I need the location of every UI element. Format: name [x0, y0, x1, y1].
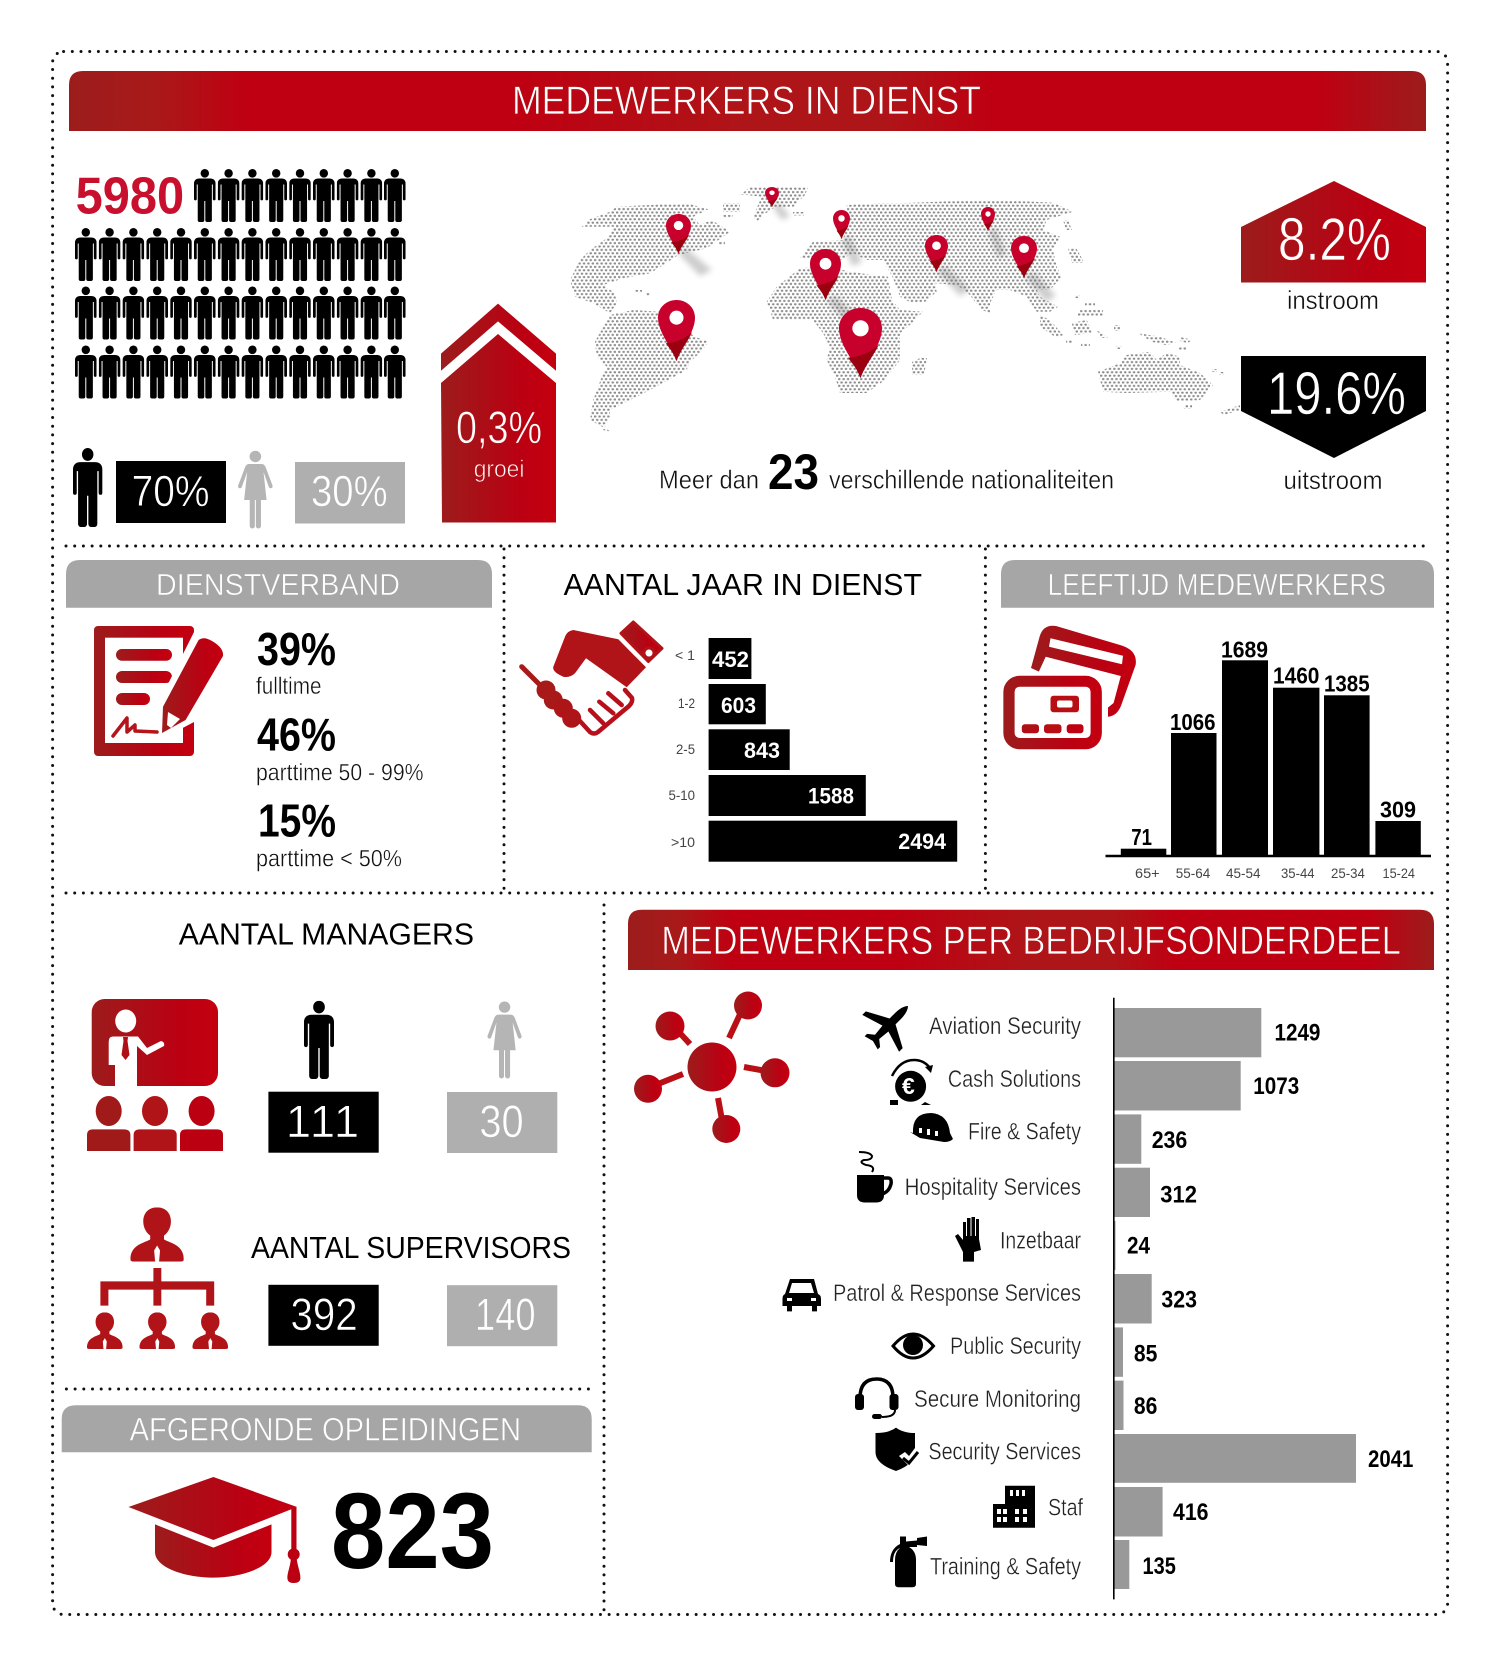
row: hospitality services [857, 1152, 1197, 1217]
row: training and safety [890, 1536, 1176, 1589]
bar: 2-5 years: 2-5 [676, 741, 695, 757]
gender split: women 30%: 30% [311, 467, 388, 516]
supervisors: women: 140 [475, 1289, 536, 1340]
parttime 50-99 share: 46% [257, 709, 336, 761]
heading [628, 910, 1434, 970]
row: training and safety: Training & Safety [930, 1553, 1081, 1580]
row: aviation security: 1249 [1274, 1019, 1320, 1046]
gender split: women 30% [238, 451, 405, 528]
row: staf [993, 1486, 1208, 1536]
bar: under 1 year: < 1 [675, 647, 695, 663]
icon: euro coin: € [902, 1073, 915, 1099]
training count: 823 [331, 1470, 494, 1591]
gender split: men 70% [73, 448, 226, 527]
column: 55-64 [1170, 709, 1216, 881]
panel: medewerkers per bedrijfsonderdeel [628, 910, 1434, 1599]
icon: hands [955, 1217, 981, 1262]
row: cash solutions: 1073 [1253, 1073, 1299, 1100]
row: staf: Staf [1048, 1495, 1083, 1522]
panel: leeftijd medewerkers [1001, 560, 1434, 881]
row: patrol and response: 323 [1161, 1286, 1197, 1314]
map pin shadows [678, 204, 1056, 322]
column: 65+: 71 [1131, 824, 1152, 850]
row: secure monitoring: 86 [1134, 1393, 1157, 1420]
icon: plane [853, 988, 926, 1061]
row: public security: Public Security [950, 1333, 1081, 1360]
title banner: MEDEWERKERS IN DIENST [512, 79, 981, 123]
icon: buildings [993, 1486, 1035, 1528]
row: aviation security: Aviation Security [929, 1013, 1081, 1040]
headcount number: 5980 [76, 168, 184, 226]
bar: 5-10 years: 5-10 [668, 787, 695, 803]
row: hospitality services: Hospitality Services [905, 1174, 1081, 1201]
bar: over 10 years: >10 [671, 834, 695, 850]
row: inzetbaar: Inzetbaar [1000, 1228, 1081, 1254]
bar: 5-10 years [668, 775, 866, 816]
column: 45-54: 1689 [1221, 636, 1268, 662]
parttime 50-99 share [256, 709, 424, 787]
parttime below 50 share: 15% [258, 795, 336, 847]
supervisors: men [268, 1285, 379, 1346]
column: 65+ [1121, 824, 1166, 881]
panel: aantal jaar in dienst [522, 567, 957, 862]
outflow badge: uitstroom [1284, 465, 1382, 495]
row: patrol and response: Patrol & Response Services [833, 1280, 1081, 1307]
bar: 1-2 years: 603 [721, 693, 756, 718]
supervisors: women [447, 1285, 557, 1346]
managers: men: 111 [286, 1096, 359, 1147]
icon: coffee cup [857, 1152, 891, 1202]
column chart: age [1121, 636, 1421, 881]
column: 15-24: 309 [1380, 796, 1416, 822]
bar: over 10 years [671, 821, 957, 862]
bar: over 10 years: 2494 [898, 829, 947, 854]
icon: cards [1003, 626, 1136, 750]
row: cash solutions: Cash Solutions [948, 1066, 1081, 1093]
icon: eye [893, 1334, 934, 1358]
row: fire and safety: Fire & Safety [968, 1119, 1081, 1146]
managers: women [447, 1001, 557, 1153]
heading [1001, 560, 1434, 608]
map pins [658, 187, 1037, 378]
column: 15-24 [1375, 796, 1421, 881]
managers: men [268, 1001, 379, 1153]
heading: supervisors: AANTAL SUPERVISORS [251, 1230, 571, 1265]
people pictogram rows [75, 169, 406, 398]
column: 25-34: 1385 [1324, 671, 1370, 697]
column: 65+: 65+ [1135, 865, 1160, 881]
fulltime share: fulltime [256, 673, 322, 700]
row: patrol and response [782, 1274, 1197, 1324]
supervisors: men: 392 [290, 1289, 358, 1340]
panel: managers and supervisors [87, 916, 571, 1349]
icon: helmet [910, 1113, 953, 1142]
inflow badge [1241, 181, 1426, 315]
gender split: men 70%: 70% [132, 467, 210, 516]
column: 15-24: 15-24 [1382, 865, 1415, 881]
icon: presenter [87, 999, 223, 1151]
column: 35-44: 35-44 [1281, 865, 1315, 881]
heading: AANTAL JAAR IN DIENST [564, 567, 922, 602]
row: public security [893, 1327, 1157, 1377]
heading: LEEFTIJD MEDEWERKERS [1048, 567, 1386, 602]
column: 55-64: 55-64 [1176, 865, 1211, 881]
row: inzetbaar: 24 [1127, 1232, 1151, 1259]
icon: network [634, 992, 790, 1143]
bar: under 1 year: 452 [712, 647, 749, 672]
fulltime share [256, 623, 336, 700]
row: inzetbaar [955, 1217, 1151, 1270]
fulltime share: 39% [257, 623, 336, 675]
heading: AFGERONDE OPLEIDINGEN [130, 1412, 521, 1448]
growth arrow [441, 304, 556, 522]
row: secure monitoring: Secure Monitoring [914, 1386, 1081, 1413]
parttime 50-99 share: parttime 50 - 99% [256, 760, 424, 787]
row: security services: 2041 [1368, 1446, 1413, 1473]
row: training and safety: 135 [1142, 1553, 1176, 1580]
icon: euro coin [890, 1060, 933, 1105]
heading [66, 560, 492, 608]
bar: 1-2 years [678, 684, 766, 724]
bar: 5-10 years: 1588 [808, 783, 854, 808]
parttime below 50 share: parttime < 50% [256, 846, 402, 873]
icon: car [782, 1279, 821, 1311]
row: security services: Security Services [928, 1438, 1081, 1466]
icon: handshake [522, 622, 662, 734]
inflow badge: instroom [1287, 285, 1379, 315]
icon: extinguisher [890, 1536, 927, 1587]
row: staf: 416 [1173, 1499, 1208, 1526]
row: cash solutions [890, 1060, 1299, 1110]
panel: dienstverband [66, 560, 492, 873]
bar: 2-5 years [676, 729, 790, 770]
horizontal bar chart: years of service [668, 638, 957, 862]
icon: shield [876, 1428, 922, 1471]
icon: headset [855, 1379, 898, 1419]
column: 45-54 [1221, 636, 1268, 881]
column: 55-64: 1066 [1170, 709, 1216, 735]
outflow badge: 19.6% [1267, 360, 1406, 427]
bar: 1-2 years: 1-2 [678, 695, 695, 711]
dotted world map [570, 187, 1240, 432]
row: hospitality services: 312 [1160, 1182, 1197, 1208]
icon: graduation cap [128, 1477, 300, 1583]
column: 35-44: 1460 [1273, 662, 1319, 688]
inflow badge: 8.2% [1278, 206, 1391, 273]
growth arrow: 0,3% [456, 402, 542, 453]
column: 35-44 [1273, 662, 1319, 881]
row: fire and safety: 236 [1152, 1127, 1187, 1154]
nationalities caption: verschillende nationaliteiten [829, 465, 1114, 495]
nationalities caption: Meer dan [659, 465, 759, 495]
nationalities caption: 23 [768, 444, 819, 500]
row: public security: 85 [1134, 1340, 1157, 1367]
title banner [69, 71, 1426, 131]
icon: contract and pen [94, 626, 232, 756]
nationalities caption [659, 444, 1114, 500]
row: secure monitoring [855, 1379, 1157, 1430]
row: security services [876, 1428, 1413, 1483]
bar: under 1 year [675, 638, 751, 679]
heading [62, 1405, 592, 1452]
panel: medewerkers in dienst [69, 71, 1426, 528]
row: fire and safety [910, 1113, 1187, 1164]
row: aviation security [853, 988, 1320, 1061]
panel: afgeronde opleidingen [62, 1405, 592, 1591]
managers: women: 30 [479, 1096, 524, 1147]
column: 25-34: 25-34 [1331, 865, 1365, 881]
parttime below 50 share [256, 795, 402, 873]
column: 45-54: 45-54 [1226, 865, 1261, 881]
heading: DIENSTVERBAND [156, 567, 400, 602]
growth arrow: groei [474, 456, 524, 483]
bar: 2-5 years: 843 [744, 738, 780, 763]
column: 25-34 [1324, 671, 1370, 881]
outflow badge [1241, 356, 1426, 495]
icon: organisation chart [87, 1207, 228, 1349]
heading: managers: AANTAL MANAGERS [179, 916, 474, 952]
